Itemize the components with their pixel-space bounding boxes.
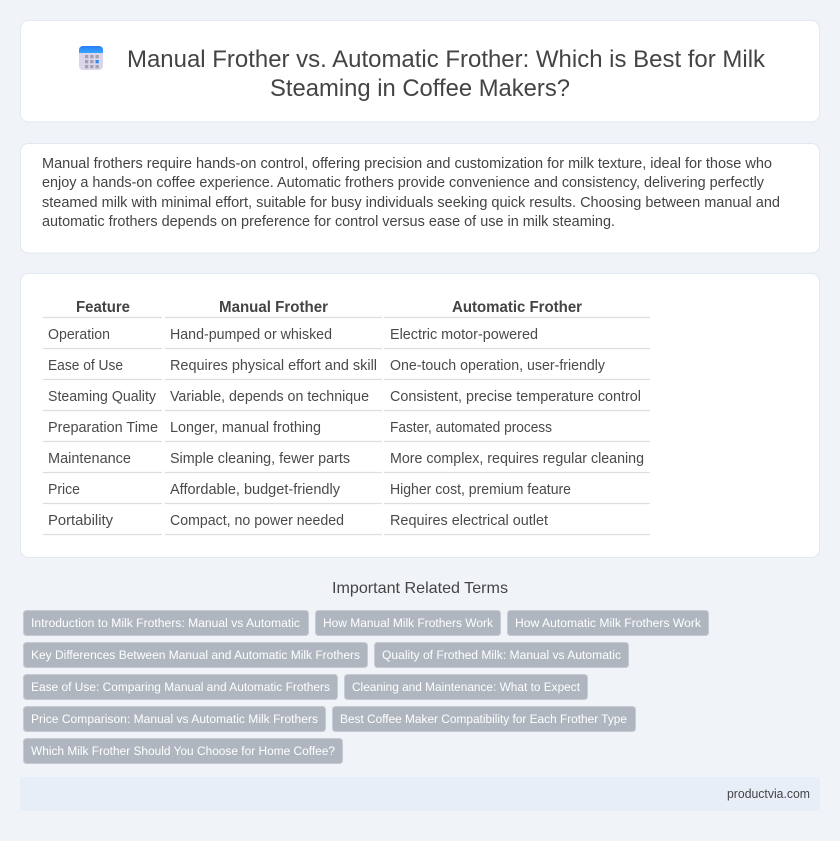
panel: header: [20, 20, 820, 122]
table row: Steaming Quality: Consistent, precise temperature control: [390, 389, 641, 405]
title: [127, 46, 766, 102]
table row: Ease of Use: Requires physical effort and skill: [170, 358, 377, 374]
table header row: Manual Frother: [219, 299, 328, 316]
tag: price: [24, 706, 326, 732]
table row: Ease of Use: One-touch operation, user-friendly: [390, 358, 606, 374]
table row: Preparation Time: Preparation Time: [48, 420, 158, 436]
panel: related term tags: [24, 610, 708, 764]
tag: key differences: Key Differences Between Manual and Automatic Milk Frothers: [31, 648, 360, 662]
table row: Preparation Time: Longer, manual frothing: [170, 420, 321, 436]
tag: introduction: Introduction to Milk Frothers: Manual vs Automatic: [31, 616, 300, 630]
title: Manual Frother vs. Automatic Frother: Which is Best for Milk: [127, 46, 766, 73]
tag: ease of use: [24, 674, 338, 700]
table row: Operation: Hand-pumped or whisked: [170, 327, 332, 343]
tag: price: Price Comparison: Manual vs Automatic Milk Frothers: [31, 712, 318, 726]
table row: Steaming Quality: Steaming Quality: [48, 389, 157, 405]
table row: Operation: Operation: [48, 327, 110, 343]
tag: compatibility: Best Coffee Maker Compatibility for Each Frother Type: [340, 712, 627, 726]
table row: Price: Higher cost, premium feature: [390, 482, 571, 498]
table row: Ease of Use: Ease of Use: [48, 358, 123, 374]
panel: comparison table: [20, 274, 820, 558]
table row: Price: Affordable, budget-friendly: [170, 482, 341, 498]
tag: quality: Quality of Frothed Milk: Manual vs Automatic: [382, 648, 621, 662]
text block: introduction paragraph: enjoy a hands-on coffee experience. Automatic frothers provide convenience and consistency, delivering perfectly: [42, 175, 765, 191]
tag: automatic frothers: [508, 610, 708, 636]
heading: related terms: Important Related Terms: [332, 580, 508, 597]
tag: choosing: Which Milk Frother Should You Choose for Home Coffee?: [31, 744, 335, 758]
table row: Steaming Quality: [48, 389, 641, 405]
tag: cleaning: Cleaning and Maintenance: What to Expect: [352, 680, 581, 694]
text block: introduction paragraph: [42, 156, 780, 230]
tag: introduction: [24, 610, 308, 636]
panel: introduction: [20, 144, 820, 253]
text block: introduction paragraph: steamed milk with minimal effort, suitable for busy individuals seeking quick results. Choosing between manual and: [42, 195, 780, 211]
table row: Steaming Quality: Variable, depends on technique: [170, 389, 369, 405]
footer: [20, 777, 820, 811]
text block: introduction paragraph: Manual frothers require hands-on control, offering precision and customization for milk texture, ideal for those who: [42, 156, 772, 172]
table row: Portability: Requires electrical outlet: [390, 513, 548, 529]
tag: manual frothers: How Manual Milk Frothers Work: [323, 616, 494, 630]
table row: Operation: Electric motor-powered: [390, 327, 538, 343]
text block: introduction paragraph: automatic frothers depends on preference for control versus ease of use in milk steaming.: [42, 214, 615, 230]
table row: Portability: [48, 513, 548, 529]
table header row: Automatic Frother: [452, 299, 582, 316]
table row: Maintenance: Simple cleaning, fewer parts: [170, 451, 350, 467]
table row: Maintenance: More complex, requires regular cleaning: [390, 451, 644, 467]
table row: Price: [48, 482, 571, 498]
tag: manual frothers: [316, 610, 500, 636]
title: Steaming in Coffee Makers?: [270, 75, 570, 102]
table row: Preparation Time: Faster, automated process: [390, 420, 552, 436]
table row: Operation: [48, 327, 538, 343]
tag: quality: [374, 642, 628, 668]
table row: Maintenance: [48, 451, 644, 467]
table row: Portability: Compact, no power needed: [170, 513, 344, 529]
icon: calendar: [79, 46, 103, 70]
table row: Maintenance: Maintenance: [48, 451, 131, 467]
table row: Price: Price: [48, 482, 80, 498]
table row: Portability: Portability: [48, 513, 114, 529]
tag: choosing: [24, 738, 342, 764]
tag: compatibility: [332, 706, 636, 732]
table row: Preparation Time: [48, 420, 552, 436]
tag: ease of use: Ease of Use: Comparing Manual and Automatic Frothers: [31, 680, 330, 694]
tag: cleaning: [344, 674, 588, 700]
table row: Ease of Use: [48, 358, 606, 374]
tag: automatic frothers: How Automatic Milk Frothers Work: [515, 616, 702, 630]
table header row: Feature: [76, 299, 130, 316]
table header row: [76, 299, 582, 316]
tag: key differences: [24, 642, 368, 668]
footer: productvia.com: [727, 787, 810, 801]
